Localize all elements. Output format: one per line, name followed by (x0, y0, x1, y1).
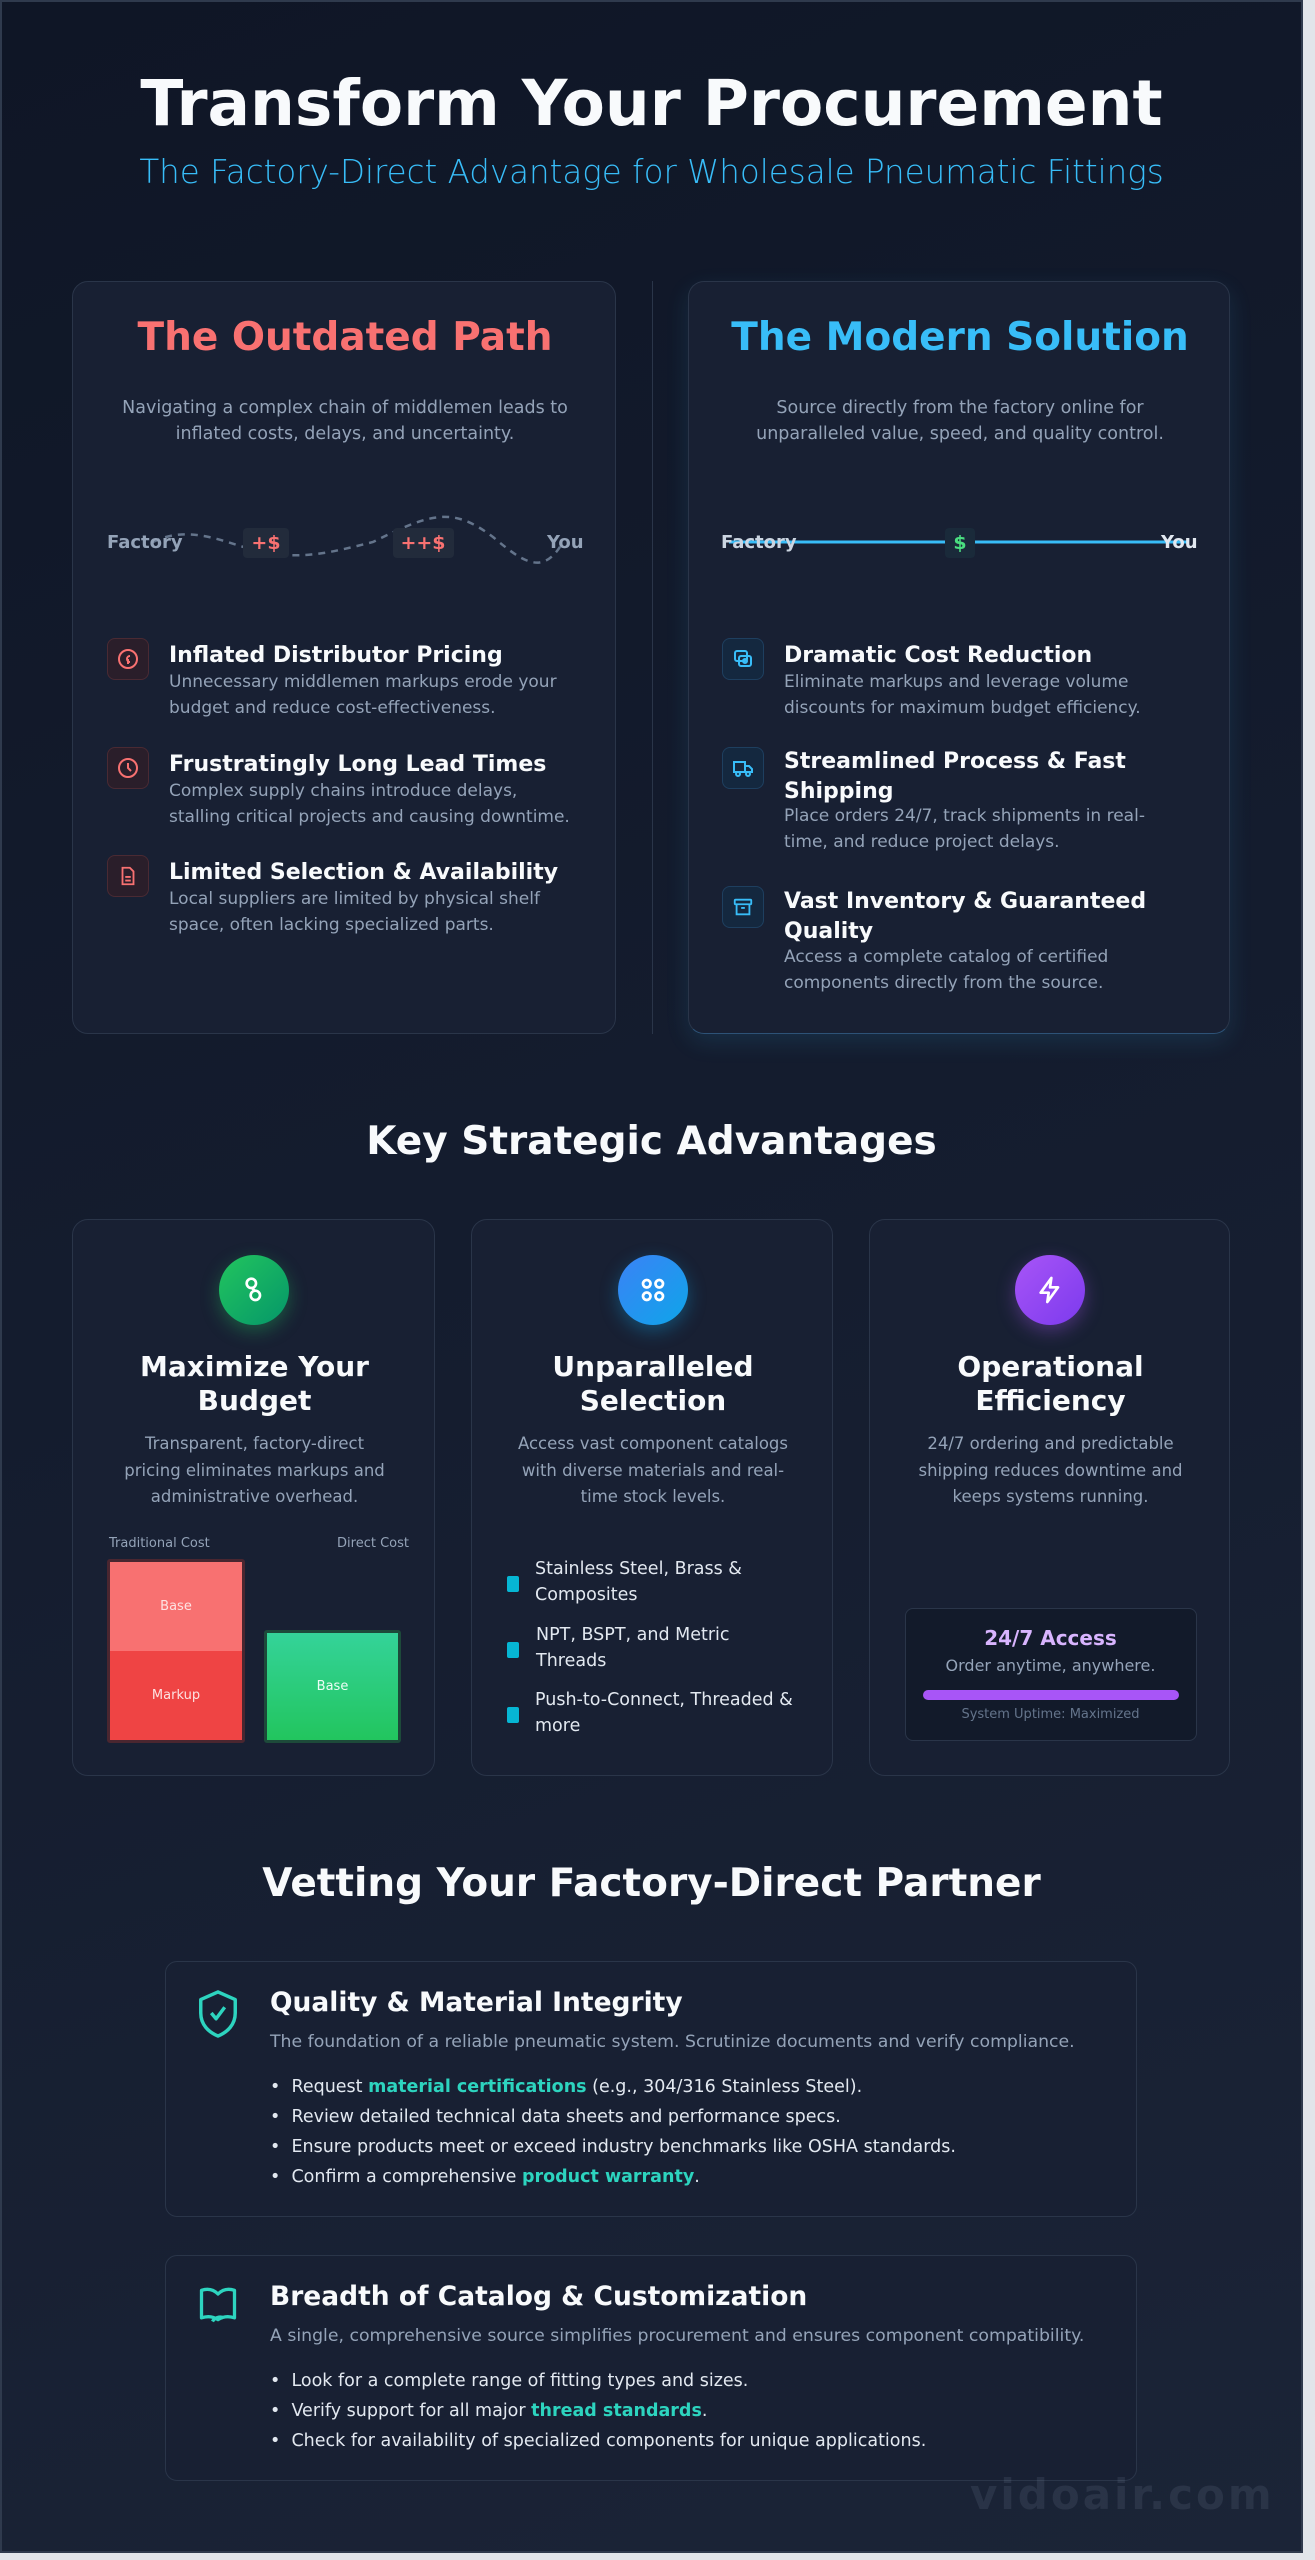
bar: direct (264, 1630, 401, 1743)
panel: outdated path (72, 281, 616, 1034)
divider (652, 281, 653, 1034)
list: materials: Stainless Steel, Brass & (535, 1559, 742, 1579)
item: inflated pricing: Inflated Distributor Pricing (169, 643, 503, 668)
text: efficiency description: keeps systems running. (952, 1487, 1148, 1506)
icon: coin (107, 638, 149, 680)
icon: archive (722, 886, 764, 928)
heading: quality: Quality & Material Integrity (270, 1987, 683, 2018)
heading: modern solution: The Modern Solution (731, 315, 1189, 360)
list: materials: more (535, 1716, 580, 1736)
callout: 24/7 access: System Uptime: Maximized (961, 1707, 1140, 1722)
callout: 24/7 access: 24/7 Access (984, 1626, 1117, 1650)
text: budget description: administrative overhead. (151, 1487, 358, 1506)
icon: green circle (219, 1255, 289, 1325)
text: selection description: Access vast component catalogs (518, 1434, 788, 1453)
text: budget description: pricing eliminates markups and (124, 1460, 385, 1480)
heading: unparalleled selection (552, 1350, 754, 1417)
item: long lead times: Complex supply chains introduce delays, (169, 781, 517, 801)
icon: document (107, 855, 149, 897)
heading: maximize budget: Maximize Your (140, 1350, 369, 1383)
panel: quality & material integrity (165, 1961, 1137, 2217)
list: quality checks: • Request material certifications (e.g., 304/316 Stainless Steel). (270, 2077, 862, 2097)
text: outdated description (122, 398, 568, 444)
item: inflated pricing (107, 638, 557, 718)
text: selection description: with diverse materials and real- (522, 1460, 784, 1480)
heading: vetting partner: Vetting Your Factory-Direct Partner (262, 1861, 1041, 1906)
icon: book (200, 2288, 236, 2322)
callout: 24/7 access (905, 1608, 1197, 1741)
item: cost reduction: Dramatic Cost Reduction (784, 643, 1092, 668)
item: inflated pricing: Unnecessary middlemen markups erode your budget and reduce cost-effectiveness. (169, 672, 557, 718)
item: fast shipping: Streamlined Process & Fast Shipping (784, 749, 1126, 804)
heading: maximize budget (140, 1350, 369, 1417)
list: quality checks (270, 2077, 956, 2187)
icon: truck (722, 747, 764, 789)
watermark: vidoair.com (970, 2470, 1275, 2519)
icon: clock (107, 747, 149, 789)
chart: cost comparison: Direct Cost (337, 1536, 409, 1551)
item: cost reduction: Eliminate markups and leverage volume (784, 672, 1128, 692)
text: budget description (124, 1434, 385, 1506)
text: quality description: The foundation of a reliable pneumatic system. Scrutinize documents and verify compliance. (270, 2032, 1075, 2052)
item: limited selection (107, 855, 558, 935)
item: vast inventory (722, 886, 1146, 993)
flow diagram: middlemen path: You (546, 532, 584, 553)
panel: breadth of catalog (165, 2255, 1137, 2481)
heading: operational efficiency (957, 1350, 1144, 1417)
item: long lead times: Frustratingly Long Lead Times (169, 752, 546, 777)
bar: traditional: Base (160, 1599, 192, 1614)
panel: modern solution (688, 281, 1230, 1034)
heading: maximize budget: Budget (198, 1384, 311, 1417)
text: selection description (518, 1434, 788, 1506)
list: quality checks: • Review detailed technical data sheets and performance specs. (270, 2107, 841, 2127)
icon: shield (199, 1990, 237, 2038)
callout: 24/7 access: Order anytime, anywhere. (946, 1656, 1155, 1675)
bar: traditional (107, 1559, 245, 1743)
heading: key strategic advantages: Key Strategic Advantages (366, 1119, 937, 1164)
item: vast inventory: Access a complete catalog of certified (784, 947, 1108, 967)
flow diagram: direct path: Factory (721, 532, 797, 553)
heading: catalog: Breadth of Catalog & Customization (270, 2281, 807, 2312)
flow diagram: direct path (721, 528, 1198, 558)
list: catalog checks: • Check for availability of specialized components for unique applications. (270, 2431, 926, 2451)
list: materials (507, 1559, 793, 1736)
list: catalog checks (270, 2371, 926, 2451)
item: vast inventory: components directly from the source. (784, 973, 1103, 993)
heading: operational efficiency: Efficiency (975, 1384, 1126, 1417)
list: materials: Push-to-Connect, Threaded & (535, 1690, 793, 1710)
chart: cost comparison: Traditional Cost (109, 1536, 210, 1551)
flow diagram: middlemen path: Factory (107, 532, 183, 553)
flow diagram: middlemen path: +$ (251, 532, 281, 554)
card: unparalleled selection (471, 1219, 833, 1776)
bar: direct: Base (317, 1679, 348, 1694)
card: maximize budget (72, 1219, 435, 1776)
item: long lead times (107, 747, 570, 827)
item: fast shipping: time, and reduce project delays. (784, 832, 1060, 852)
text: modern description: unparalleled value, speed, and quality control. (756, 424, 1164, 444)
text: modern description: Source directly from the factory online for (776, 398, 1144, 418)
heading: unparalleled selection: Unparalleled (552, 1350, 754, 1383)
flow diagram: direct path: You (1160, 532, 1198, 553)
item: vast inventory: Vast Inventory & Guaranteed Quality (784, 889, 1146, 944)
item: fast shipping (722, 747, 1145, 852)
heading: unparalleled selection: Selection (580, 1384, 726, 1417)
flow diagram: direct path: $ (953, 532, 967, 554)
bar: traditional: Markup (152, 1688, 200, 1703)
list: quality checks: • Confirm a comprehensive product warranty. (270, 2167, 700, 2187)
text: efficiency description: shipping reduces downtime and (918, 1460, 1182, 1480)
item: limited selection: Limited Selection & Availability (169, 860, 558, 885)
list: materials: Threads (536, 1651, 606, 1671)
flow diagram: middlemen path (107, 516, 584, 564)
icon: money (722, 638, 764, 680)
text: selection description: time stock levels. (581, 1487, 725, 1506)
list: catalog checks: • Look for a complete range of fitting types and sizes. (270, 2371, 748, 2391)
list: materials: Composites (535, 1585, 638, 1605)
card: operational efficiency (869, 1219, 1230, 1776)
item: fast shipping: Place orders 24/7, track shipments in real- (784, 806, 1145, 826)
icon: blue circle (618, 1255, 688, 1325)
list: materials: NPT, BSPT, and Metric (536, 1625, 730, 1645)
item: cost reduction (722, 638, 1141, 718)
text: efficiency description (918, 1434, 1182, 1506)
item: long lead times: stalling critical projects and causing downtime. (169, 807, 570, 827)
chart: cost comparison (107, 1536, 409, 1743)
text: outdated description: inflated costs, delays, and uncertainty. (176, 424, 514, 444)
list: catalog checks: • Verify support for all major thread standards. (270, 2401, 707, 2421)
text: budget description: Transparent, factory-direct (145, 1434, 364, 1453)
text: catalog description: A single, comprehensive source simplifies procurement and ensures component compatibility. (270, 2326, 1084, 2346)
list: quality checks: • Ensure products meet or exceed industry benchmarks like OSHA standards. (270, 2137, 956, 2157)
item: limited selection: Local suppliers are limited by physical shelf space, often lacking specialized parts. (169, 889, 540, 935)
heading: operational efficiency: Operational (957, 1350, 1144, 1383)
flow diagram: middlemen path: ++$ (400, 532, 446, 554)
text: outdated description: Navigating a complex chain of middlemen leads to (122, 398, 568, 418)
subtitle: The Factory-Direct Advantage for Wholesale Pneumatic Fittings (139, 153, 1164, 191)
heading: outdated path: The Outdated Path (137, 315, 553, 360)
icon: purple circle (1015, 1255, 1085, 1325)
title: Transform Your Procurement (140, 67, 1163, 140)
text: efficiency description: 24/7 ordering and predictable (927, 1434, 1174, 1453)
item: cost reduction: discounts for maximum budget efficiency. (784, 698, 1141, 718)
text: modern description (756, 398, 1164, 444)
